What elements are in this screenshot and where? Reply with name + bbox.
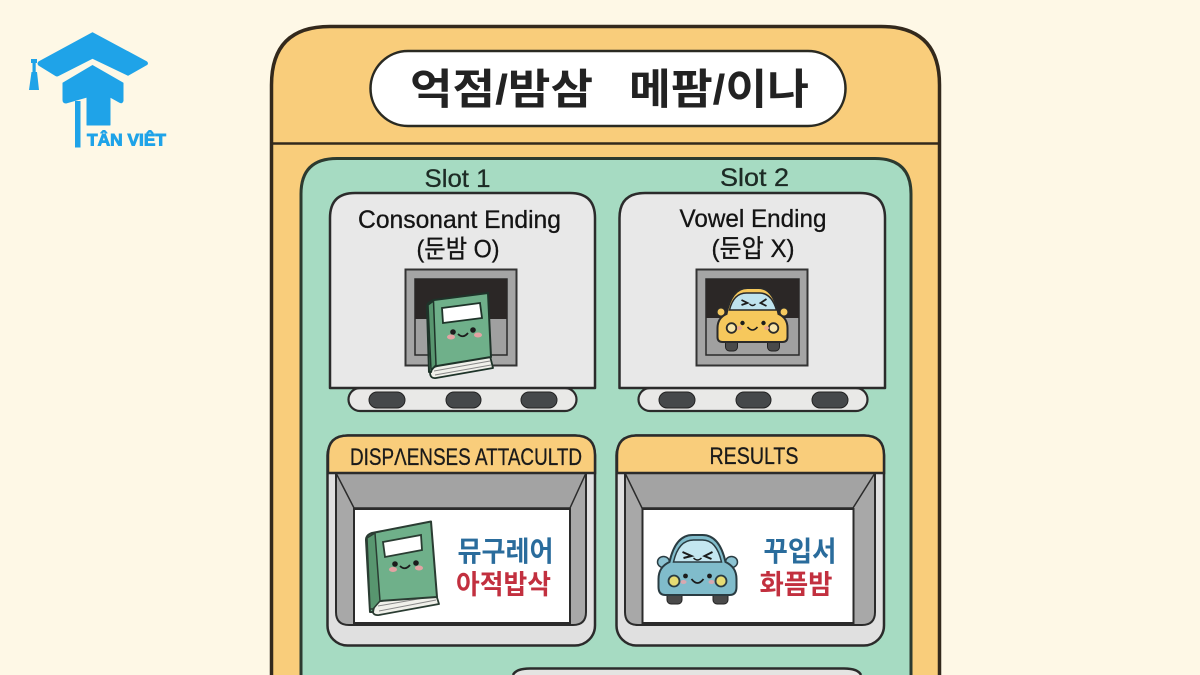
title: 억점/밤삼 xyxy=(410,66,593,113)
icon: arrow up xyxy=(63,66,123,125)
icon: tassel xyxy=(29,59,39,90)
slot 1 xyxy=(330,165,595,411)
slot 1 subheading: (둔밤 O) xyxy=(416,236,500,264)
slot 1 heading: Consonant Ending xyxy=(358,206,561,234)
slot 1 label: Slot 1 xyxy=(424,165,490,193)
slot 2 card xyxy=(620,193,885,388)
slot 2 label: Slot 2 xyxy=(720,164,789,192)
logo: Tân Việt xyxy=(29,33,167,150)
tray 2 frame xyxy=(616,436,884,646)
bottom panel xyxy=(512,668,862,675)
tray 1 red text: 아적밥삭 xyxy=(456,570,551,600)
conveyor 2 xyxy=(638,388,868,411)
icon: green book xyxy=(427,293,493,378)
tray 1 frame xyxy=(328,436,595,646)
tray 1 interior xyxy=(336,473,586,625)
tray 2 red text: 화픔밤 xyxy=(760,570,833,600)
tray 2 header xyxy=(617,436,884,473)
logo wordmark: TÂN VIÊT xyxy=(87,130,167,150)
tray 1 window xyxy=(354,509,570,623)
tray 1 blue text: 뮤구레어 xyxy=(458,536,554,567)
slot 2 subheading: (둔압 X) xyxy=(712,235,794,263)
slot 1 card xyxy=(330,193,595,388)
panel: green machine interior xyxy=(301,158,911,675)
title: 메팜/이나 xyxy=(629,66,809,113)
slot 2 window xyxy=(696,270,808,366)
icon: green book result xyxy=(366,522,439,615)
header divider xyxy=(271,142,940,145)
tray 2 header text: RESULTS xyxy=(710,443,798,470)
panel: machine body xyxy=(271,26,940,675)
tray 2 interior xyxy=(625,473,875,625)
slot 2 heading: Vowel Ending xyxy=(680,205,826,233)
conveyor 1 xyxy=(348,388,576,411)
tray 1 header text: DISPΛENSES ATTACULTD xyxy=(350,444,582,471)
panel: result tray 2 xyxy=(616,436,884,646)
icon: graduation cap xyxy=(38,33,147,76)
slot 2 xyxy=(620,164,885,411)
slot 1 window xyxy=(406,270,516,366)
logo stem xyxy=(75,101,80,148)
panel: result tray 1 xyxy=(328,436,595,646)
tray 2 window xyxy=(642,509,854,623)
tray 1 header xyxy=(328,436,595,473)
icon: blue car xyxy=(658,535,738,604)
tray 2 blue text: 꾸입서 xyxy=(764,536,836,567)
icon: yellow car xyxy=(717,288,788,351)
title pill xyxy=(370,51,846,126)
